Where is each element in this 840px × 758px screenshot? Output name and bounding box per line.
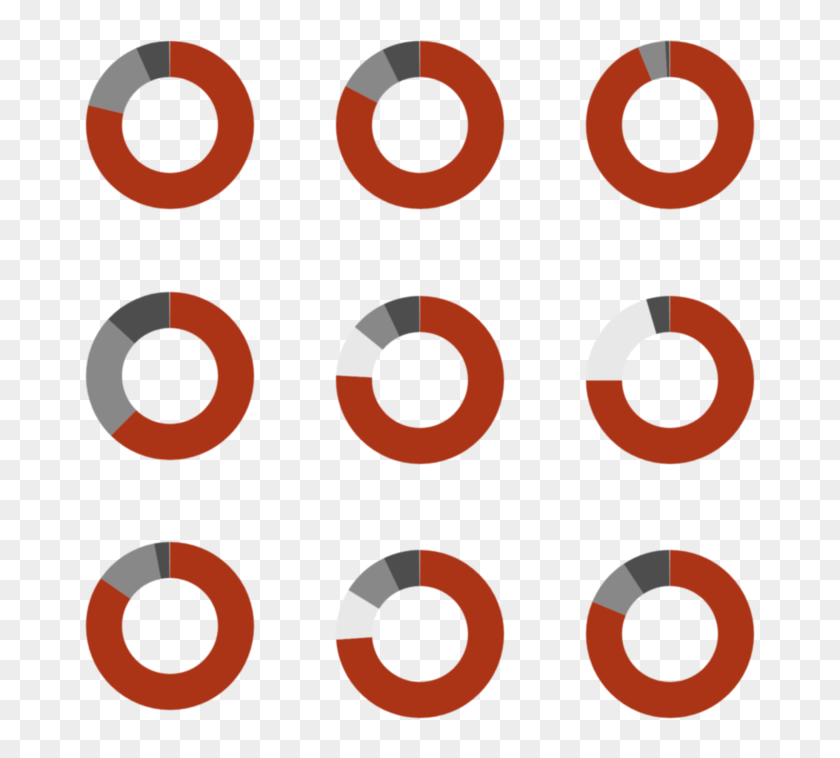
donut chart: row 1 column 1: [104, 59, 236, 191]
donut chart: row 1 column 2: [354, 59, 486, 191]
donut chart: row 3 column 2: [354, 568, 486, 700]
donut chart: row 2 column 1: [104, 310, 236, 442]
donut chart: row 1 column 3: [604, 59, 736, 191]
donut chart: row 2 column 3: [604, 314, 736, 446]
donut chart: row 2 column 2: [354, 314, 486, 446]
donut chart: row 3 column 3: [604, 568, 736, 700]
donut chart: row 3 column 1: [104, 560, 236, 692]
